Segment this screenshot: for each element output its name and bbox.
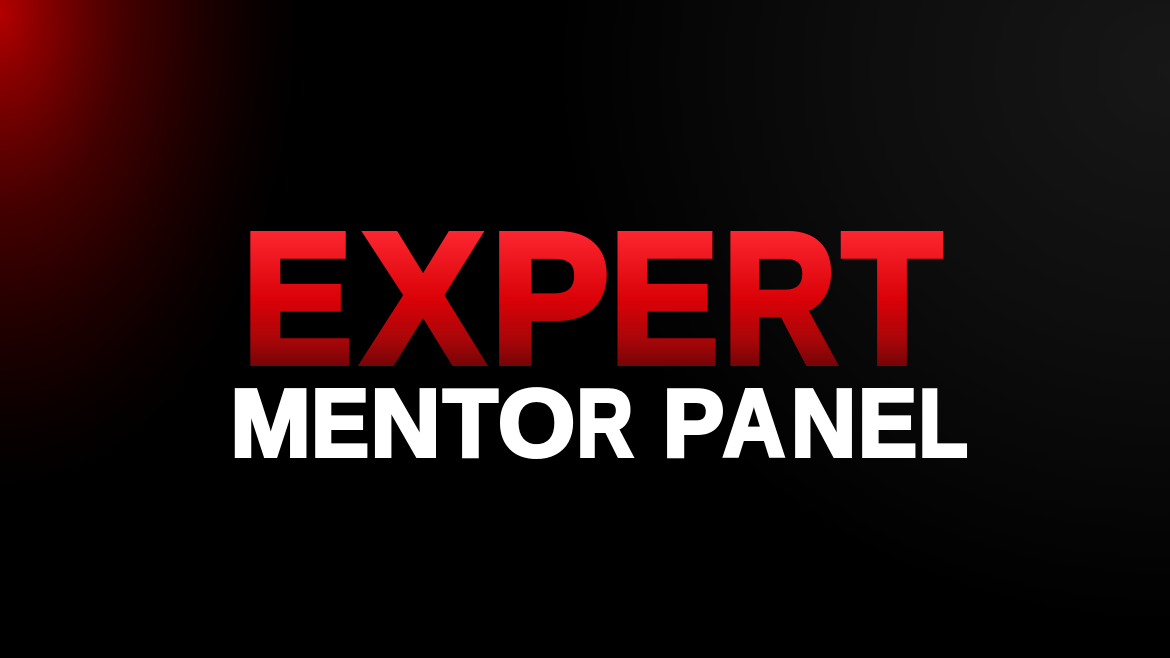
- heading: MENTOR PANEL: N: [370, 370, 440, 477]
- heading: EXPERT: T: [842, 196, 942, 402]
- heading: EXPERT: R: [723, 196, 837, 402]
- heading: EXPERT: E: [610, 196, 719, 402]
- heading: MENTOR PANEL: L: [919, 370, 968, 477]
- heading: MENTOR PANEL: R: [577, 370, 633, 477]
- heading: MENTOR PANEL: O: [498, 370, 575, 477]
- heading: MENTOR PANEL: T: [443, 370, 498, 477]
- heading: MENTOR PANEL: E: [858, 370, 917, 477]
- heading: EXPERT: X: [362, 196, 483, 402]
- heading: MENTOR PANEL: E: [311, 370, 369, 477]
- heading: EXPERT: E: [242, 196, 352, 402]
- heading: MENTOR PANEL: N: [791, 370, 856, 477]
- heading: MENTOR PANEL: P: [663, 370, 724, 477]
- heading: MENTOR PANEL: M: [230, 370, 311, 477]
- heading: EXPERT: P: [491, 196, 610, 402]
- heading: MENTOR PANEL: A: [723, 370, 785, 477]
